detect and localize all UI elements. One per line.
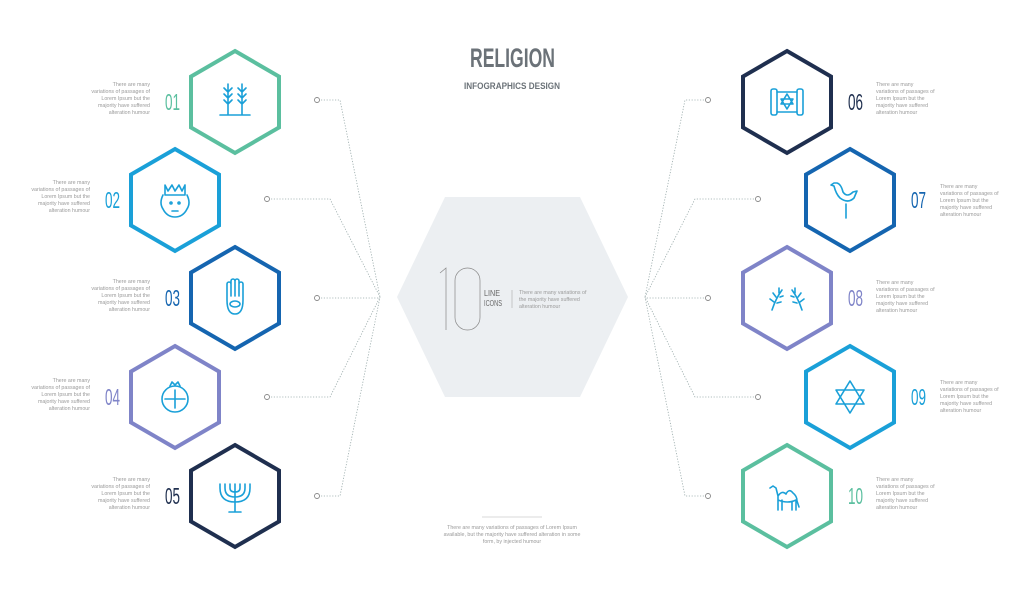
center number 10	[440, 268, 480, 330]
item 02: 02	[105, 187, 120, 213]
item 03: variations of passages of	[91, 286, 151, 292]
item 05: There are many	[113, 477, 150, 483]
item 08: Lorem Ipsum but the	[876, 294, 925, 300]
item 02: Lorem Ipsum but the	[41, 194, 90, 200]
item 08	[743, 247, 935, 349]
center hexagon: ICONS	[484, 299, 502, 308]
item 06: majority have suffered	[876, 103, 928, 109]
item 09: Lorem Ipsum but the	[940, 394, 989, 400]
item 07	[806, 149, 999, 251]
item 01: 01	[165, 89, 180, 115]
connector lines	[264, 98, 760, 498]
item 07: There are many	[940, 184, 978, 190]
item 03: alteration humour	[109, 307, 150, 313]
item 08: alteration humour	[876, 308, 917, 314]
item 03: 03	[165, 285, 180, 311]
item 09: alteration humour	[940, 408, 981, 414]
item 06: alteration humour	[876, 110, 917, 116]
item 10: alteration humour	[876, 505, 917, 511]
item 04: majority have suffered	[38, 399, 90, 405]
item 04: 04	[105, 384, 120, 410]
center hexagon: There are many variations of	[519, 290, 587, 296]
item 10: variations of passages of	[876, 484, 935, 490]
item 03: majority have suffered	[98, 300, 150, 306]
item 01	[91, 51, 279, 153]
item 05	[91, 445, 279, 547]
item 02: There are many	[53, 180, 90, 186]
item 08: majority have suffered	[876, 301, 928, 307]
item 02: majority have suffered	[38, 201, 90, 207]
bottom text	[444, 517, 580, 545]
item 03	[91, 247, 279, 349]
item 07: alteration humour	[940, 212, 981, 218]
item 10: 10	[848, 483, 863, 509]
title	[464, 43, 560, 92]
item 04	[31, 346, 219, 448]
center hexagon	[397, 197, 628, 397]
item 10: Lorem Ipsum but the	[876, 491, 925, 497]
item 05: variations of passages of	[91, 484, 151, 490]
center hexagon: alteration humour	[519, 304, 560, 310]
item 09: majority have suffered	[940, 401, 992, 407]
bottom text: available, but the majority have suffered alteration in some	[444, 532, 580, 538]
item 10	[743, 445, 935, 547]
item 02: alteration humour	[49, 208, 90, 214]
item 09: There are many	[940, 380, 978, 386]
item 06: 06	[848, 89, 863, 115]
title: RELIGION	[470, 43, 555, 73]
item 04: alteration humour	[49, 406, 90, 412]
item 01: majority have suffered	[98, 103, 150, 109]
item 06: variations of passages of	[876, 89, 935, 95]
item 02: variations of passages of	[31, 187, 91, 193]
item 01: Lorem Ipsum but the	[101, 96, 150, 102]
item 01: variations of passages of	[91, 89, 151, 95]
item 06	[743, 51, 935, 153]
item 08: variations of passages of	[876, 287, 935, 293]
item 08: There are many	[876, 280, 914, 286]
item 10: There are many	[876, 477, 914, 483]
item 09: 09	[911, 384, 926, 410]
center hexagon: the majority have suffered	[519, 297, 580, 303]
item 07: 07	[911, 187, 926, 213]
item 09: variations of passages of	[940, 387, 999, 393]
item 03: Lorem Ipsum but the	[101, 293, 150, 299]
item 02	[31, 149, 219, 251]
item 05: 05	[165, 483, 180, 509]
title: INFOGRAPHICS DESIGN	[464, 81, 560, 92]
bottom text: There are many variations of passages of Lorem Ipsum	[447, 525, 578, 531]
item 04: Lorem Ipsum but the	[41, 392, 90, 398]
item 07: variations of passages of	[940, 191, 999, 197]
item 04: variations of passages of	[31, 385, 91, 391]
item 01: There are many	[113, 82, 150, 88]
item 09	[806, 346, 999, 448]
bottom text: form, by injected humour	[483, 539, 541, 545]
item 05: majority have suffered	[98, 498, 150, 504]
item 05: alteration humour	[109, 505, 150, 511]
item 06: There are many	[876, 82, 914, 88]
center hexagon: LINE	[484, 289, 500, 298]
item 03: There are many	[113, 279, 150, 285]
item 10: majority have suffered	[876, 498, 928, 504]
item 05: Lorem Ipsum but the	[101, 491, 150, 497]
item 07: Lorem Ipsum but the	[940, 198, 989, 204]
item 01: alteration humour	[109, 110, 150, 116]
item 08: 08	[848, 285, 863, 311]
item 06: Lorem Ipsum but the	[876, 96, 925, 102]
item 04: There are many	[53, 378, 90, 384]
item 07: majority have suffered	[940, 205, 992, 211]
